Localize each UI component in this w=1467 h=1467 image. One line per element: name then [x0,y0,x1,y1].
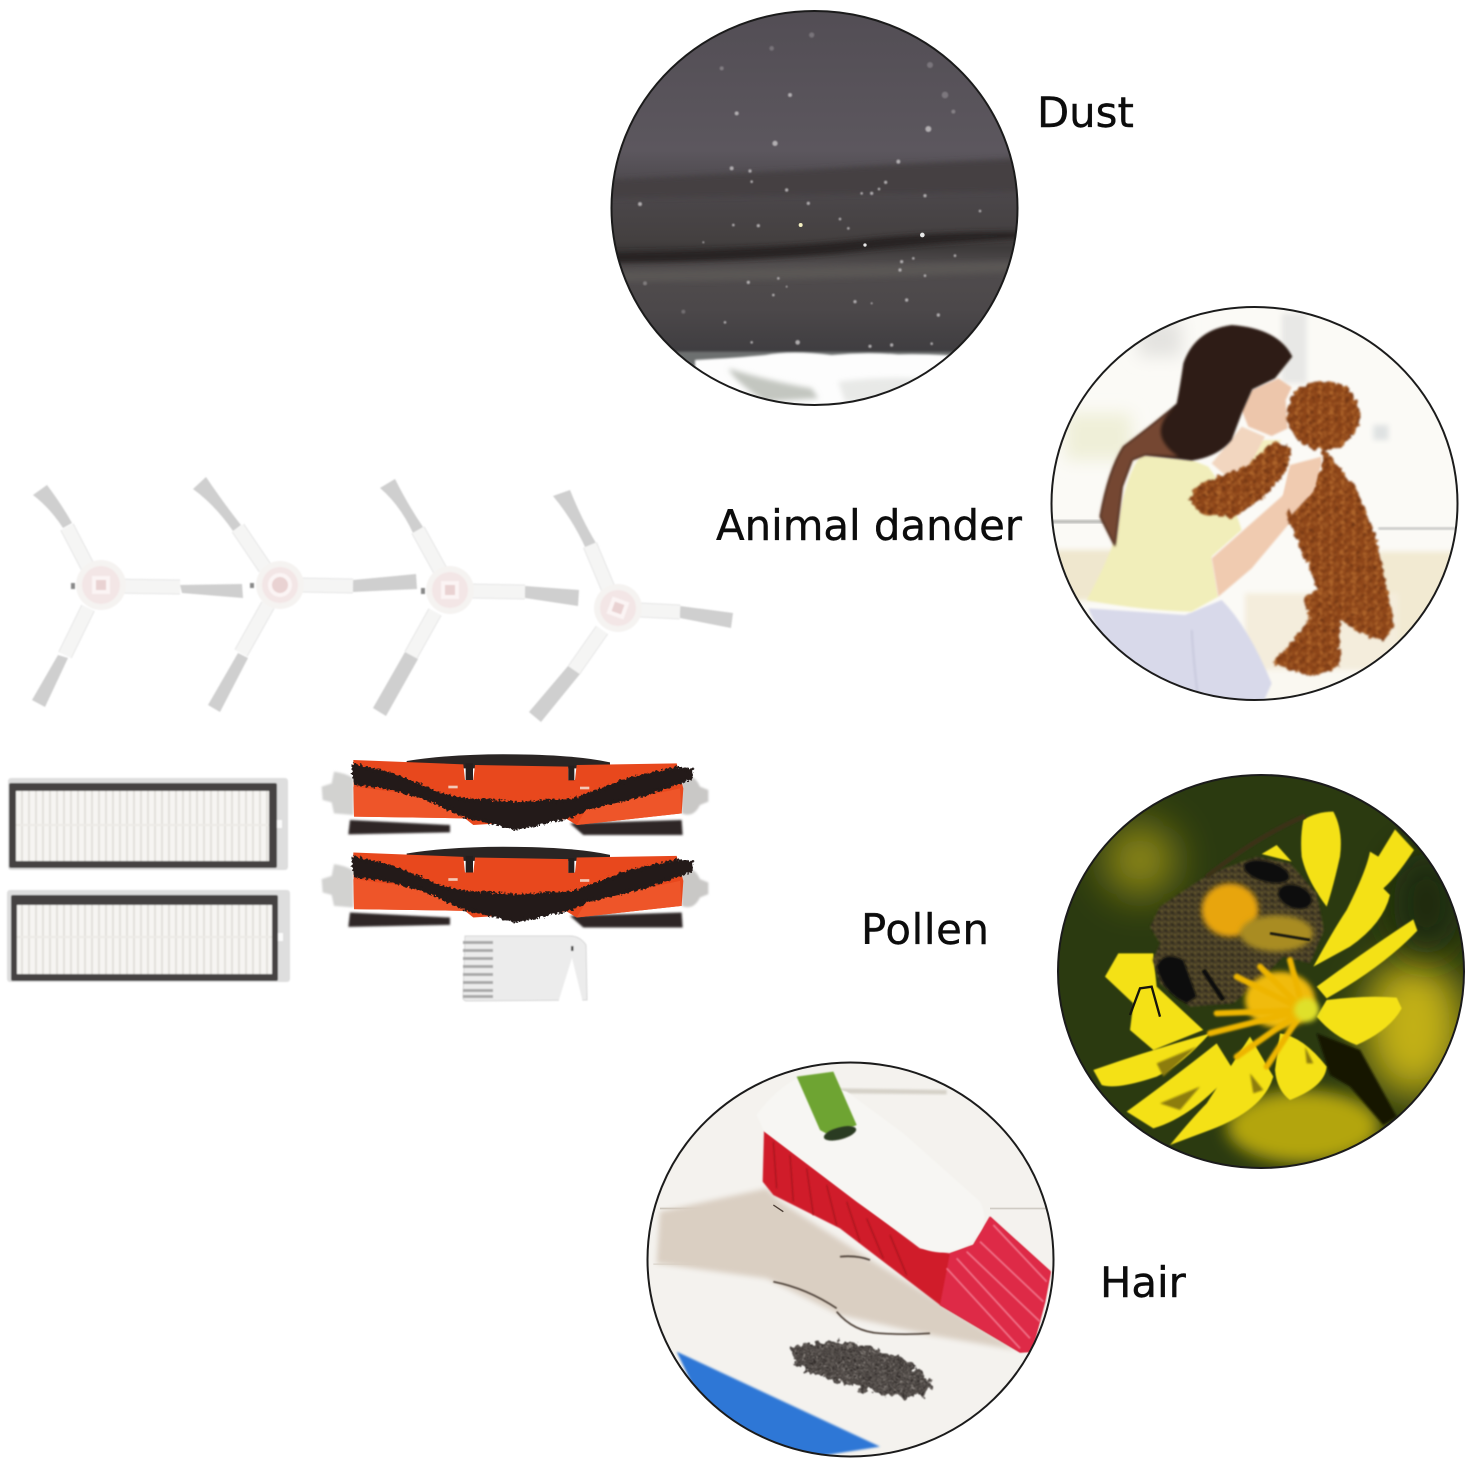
neck and face [1211,426,1266,475]
dog [1188,380,1393,677]
hand and forearm [1212,457,1322,597]
panel: animal dander circle [1045,300,1465,713]
stem [1317,1033,1397,1125]
label: Dust: Dust [1037,88,1134,137]
main roller brush 1 [322,754,708,835]
side brush 1 [32,485,243,707]
panel: hair circle [640,1055,1060,1463]
sparkles [638,32,981,348]
panel: dust circle [605,5,1025,410]
hair [1100,325,1292,547]
label: Animal dander: Animal dander [716,501,1023,550]
bee [1130,816,1324,1017]
flower centre [1245,972,1315,1028]
panel: pollen circle [1050,770,1467,1175]
side brush 3 [373,479,579,716]
side brush 2 [193,477,417,712]
jeans [1088,600,1272,699]
cleaning tool [463,936,587,1003]
hair on the floor [790,1342,933,1396]
white broom head [757,1078,984,1252]
main roller brush 2 [322,847,708,927]
red bristles [763,1131,1051,1352]
sweater [1087,455,1242,612]
blue floor strip [677,1352,880,1463]
side brushes [32,477,733,722]
label: Pollen: Pollen [861,905,989,954]
filter 2 [7,890,290,982]
filter 1 [8,778,288,870]
HEPA filters [7,778,290,982]
petals [1093,812,1417,1145]
label: Hair: Hair [1100,1258,1187,1307]
side brush 4 [529,490,733,722]
floor shadow [657,1188,1017,1350]
green handle [797,1072,857,1137]
